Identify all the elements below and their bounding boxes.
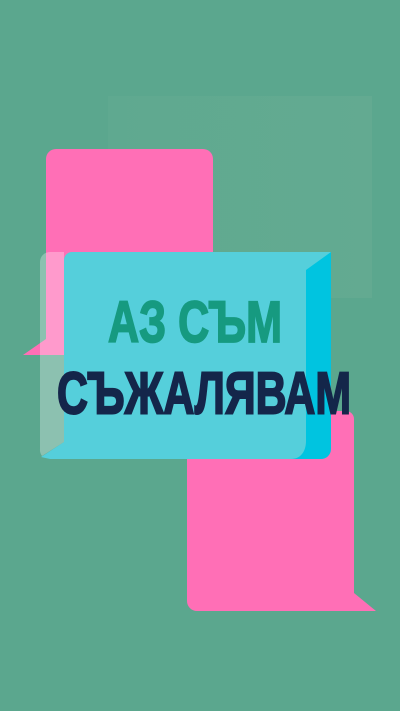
- faint background square: [108, 96, 372, 298]
- speech bubble: bottom-right pink: [187, 411, 376, 611]
- panel: translucent left fold: [40, 252, 64, 456]
- speech bubble: top-left pink: [23, 149, 213, 355]
- panel: dark cyan side: [200, 252, 331, 459]
- cyan panel: [40, 252, 331, 459]
- panel: light cyan face: [41, 252, 331, 459]
- heading: line one: АЗ СЪМ: [108, 290, 282, 355]
